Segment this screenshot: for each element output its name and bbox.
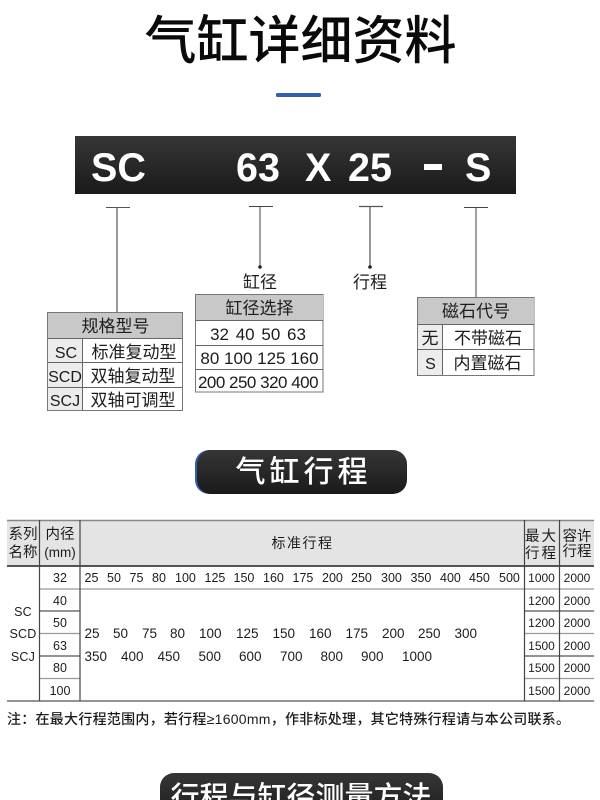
stroke rows for other bores: 50 (113, 626, 128, 641)
stroke rows for other bores (84, 626, 477, 664)
stroke rows for other bores: 80 (170, 626, 185, 641)
bore sizes: 32 (53, 571, 67, 585)
stroke rows for other bores: 75 (142, 626, 157, 641)
stroke row for bore 32: 500 (499, 571, 520, 585)
series names: SC (14, 605, 32, 619)
header: bore: (mm) (44, 545, 76, 560)
title accent line (276, 93, 321, 97)
code: series: SC (91, 146, 146, 190)
bore table heading: 缸径选择 (226, 298, 294, 318)
stroke row for bore 32: 250 (351, 571, 372, 585)
title: 气缸详细资料 (144, 13, 457, 71)
bore sizes: 40 (53, 594, 67, 608)
table: bore selection (195, 294, 323, 392)
max stroke values: 1200 (528, 594, 555, 608)
header: allowed stroke: 容许 (562, 528, 592, 545)
stroke row for bore 32: 200 (322, 571, 343, 585)
model row SCJ (50, 391, 176, 410)
stroke rows for other bores: 1000 (402, 649, 432, 664)
allowed stroke values (564, 571, 591, 698)
allowed stroke values: 2000 (564, 661, 591, 675)
bore row 3: 200 250 320 400 (198, 373, 318, 392)
allowed stroke values: 2000 (564, 684, 591, 698)
bore sizes: 50 (53, 616, 67, 630)
stroke row for bore 32: 50 (107, 571, 121, 585)
stroke row for bore 32: 400 (440, 571, 461, 585)
bore sizes: 80 (53, 661, 67, 675)
stroke rows for other bores: 25 (84, 626, 100, 641)
stroke row for bore 32: 100 (175, 571, 196, 585)
table: model types (47, 312, 182, 410)
model row SC (55, 343, 176, 362)
model row SC: SC (55, 345, 77, 362)
max stroke values: 1500 (528, 639, 555, 653)
header: bore (44, 526, 76, 560)
stroke rows for other bores: 125 (236, 626, 259, 641)
connector: bore (249, 206, 273, 269)
stroke table (7, 520, 594, 701)
footnote: 注：在最大行程范围内，若行程≥1600mm，作非标处理，其它特殊行程请与本公司联系。 (7, 711, 570, 727)
label: bore: 缸径 (243, 272, 277, 292)
header: bore: 内径 (46, 526, 74, 543)
model row SCJ: SCJ (50, 393, 80, 410)
max stroke values: 1200 (528, 616, 555, 630)
stroke row for bore 32: 75 (130, 571, 143, 585)
stroke rows for other bores: 100 (199, 626, 222, 641)
code: magnet: S (465, 146, 491, 190)
max stroke values: 1500 (528, 661, 555, 675)
magnet row none (422, 329, 522, 348)
model code bar (75, 136, 516, 194)
model row SC: 标准复动型 (92, 343, 176, 362)
header: series name: 系列 (8, 526, 38, 543)
series names (10, 605, 36, 664)
allowed stroke values: 2000 (564, 639, 591, 653)
header: allowed stroke (562, 528, 592, 560)
stroke row for bore 32: 150 (234, 571, 254, 585)
series names: SCD (10, 627, 36, 641)
allowed stroke values: 2000 (564, 594, 591, 608)
bore sizes: 63 (53, 639, 67, 653)
model row SCD: 双轴复动型 (90, 367, 176, 386)
stroke row for bore 32 (84, 571, 520, 585)
stroke rows for other bores: 500 (198, 649, 221, 664)
header: series name (8, 526, 38, 561)
magnet row none: 不带磁石 (454, 329, 522, 348)
stroke rows for other bores: 200 (382, 626, 405, 641)
stroke row for bore 32: 175 (292, 571, 313, 585)
stroke rows for other bores: 400 (121, 649, 144, 664)
stroke row for bore 32: 300 (381, 571, 402, 585)
allowed stroke values: 2000 (564, 616, 591, 630)
bore row 1: 32 40 50 63 (210, 325, 306, 344)
stroke rows for other bores: 150 (272, 626, 295, 641)
model row SCD: SCD (48, 369, 82, 386)
bore sizes (50, 571, 70, 698)
allowed stroke values: 2000 (564, 571, 591, 585)
series names: SCJ (11, 650, 35, 664)
stroke row for bore 32: 350 (410, 571, 431, 585)
max stroke values: 1000 (528, 571, 555, 585)
max stroke values (528, 571, 555, 698)
section heading: stroke: 气缸行程 (236, 456, 372, 489)
section heading: measurement method (160, 773, 443, 800)
stroke row for bore 32: 25 (84, 571, 98, 585)
code: dash (424, 164, 442, 170)
stroke rows for other bores: 800 (320, 649, 343, 664)
max stroke values: 1500 (528, 684, 555, 698)
model row SCJ: 双轴可调型 (90, 391, 176, 410)
stroke rows for other bores: 160 (309, 626, 332, 641)
table: magnet code (417, 298, 534, 376)
code: stroke: 25 (348, 146, 392, 190)
header: series name: 名称 (8, 544, 38, 561)
stroke rows for other bores: 250 (418, 626, 441, 641)
connector: stroke (359, 206, 383, 269)
section heading: stroke (195, 450, 407, 494)
code: bore: 63 (236, 146, 280, 190)
stroke rows for other bores: 450 (158, 649, 180, 664)
connector: magnet (464, 207, 488, 297)
stroke rows for other bores: 300 (454, 626, 477, 641)
header: max stroke: 行程 (525, 545, 558, 562)
header: allowed stroke: 行程 (562, 543, 592, 560)
header: standard stroke: 标准行程 (272, 535, 334, 551)
header: max stroke: 最大 (525, 528, 558, 545)
stroke rows for other bores: 175 (346, 626, 368, 641)
stroke row for bore 32: 80 (152, 571, 166, 585)
stroke rows for other bores: 350 (84, 649, 107, 664)
stroke row for bore 32: 160 (263, 571, 284, 585)
magnet row S: S (425, 356, 436, 373)
magnet row none: 无 (422, 329, 438, 348)
model table heading: 规格型号 (82, 317, 150, 336)
bore sizes: 100 (50, 684, 70, 698)
header: max stroke (525, 528, 558, 562)
magnet row S: 内置磁石 (454, 354, 522, 373)
bore row 2: 80 100 125 160 (200, 349, 319, 368)
connector: series (106, 207, 130, 312)
stroke rows for other bores: 700 (280, 649, 303, 664)
stroke row for bore 32: 125 (204, 571, 225, 585)
label: stroke: 行程 (353, 273, 387, 292)
magnet table heading: 磁石代号 (442, 302, 510, 321)
model row SCD (48, 367, 176, 386)
code: X: X (305, 146, 331, 190)
stroke rows for other bores: 900 (361, 649, 384, 664)
stroke rows for other bores: 600 (239, 649, 262, 664)
stroke row for bore 32: 450 (469, 571, 490, 585)
